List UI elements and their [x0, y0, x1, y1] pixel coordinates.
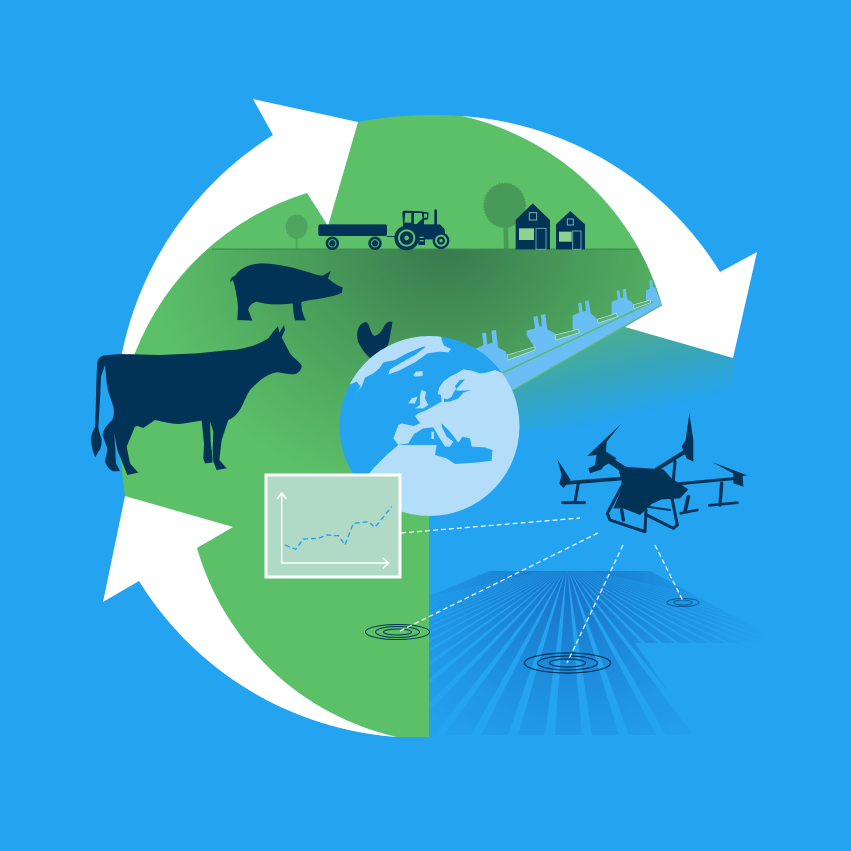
- panel: green farmland disc: [118, 115, 662, 737]
- drone arms and landing frame: [562, 451, 740, 532]
- arrow: bottom left: [103, 496, 397, 737]
- target rings: centre: [524, 653, 610, 673]
- panel: field shadow below horizon: [120, 249, 662, 737]
- panel: ray field: [429, 571, 722, 735]
- trailer: [318, 224, 397, 250]
- icon: hen: [357, 321, 392, 358]
- tractor body: [394, 209, 449, 250]
- drone rotors: [587, 424, 621, 473]
- factory strip: [470, 280, 662, 390]
- mediterranean sea: [398, 423, 492, 464]
- target rings: right: [667, 598, 699, 606]
- tractor cab windows and wheel hubs: [404, 213, 443, 242]
- icon: tractor and trailer: [318, 209, 449, 250]
- field rays: [429, 571, 722, 735]
- icon: drone: [557, 413, 747, 532]
- ireland: [408, 397, 418, 403]
- icon: pig: [230, 263, 343, 321]
- europe and africa: [369, 369, 520, 516]
- chart dashed data line: [285, 507, 392, 549]
- small island: [413, 371, 423, 377]
- house small: [556, 211, 585, 249]
- arrow: top left: [120, 99, 358, 400]
- chart panel: [266, 475, 400, 577]
- icon: small tree: [286, 214, 308, 249]
- panel: teal fade under factory strip: [510, 327, 736, 430]
- dashed links from drone: [398, 518, 683, 663]
- drone body: [613, 467, 688, 515]
- icon: globe: [340, 336, 520, 516]
- baltic sea: [444, 379, 472, 402]
- icon: big tree: [484, 183, 526, 250]
- britain: [415, 390, 428, 408]
- arrow: top right: [462, 116, 757, 358]
- house large: [516, 203, 550, 249]
- arctic land: [345, 336, 451, 395]
- sardinia: [431, 432, 434, 439]
- icon: cow: [91, 325, 302, 475]
- icon: farm houses: [516, 203, 585, 249]
- chart axes: [277, 493, 388, 568]
- target rings: left: [366, 624, 430, 640]
- trailer wheel hubs: [329, 240, 379, 247]
- horizon line: [212, 248, 638, 250]
